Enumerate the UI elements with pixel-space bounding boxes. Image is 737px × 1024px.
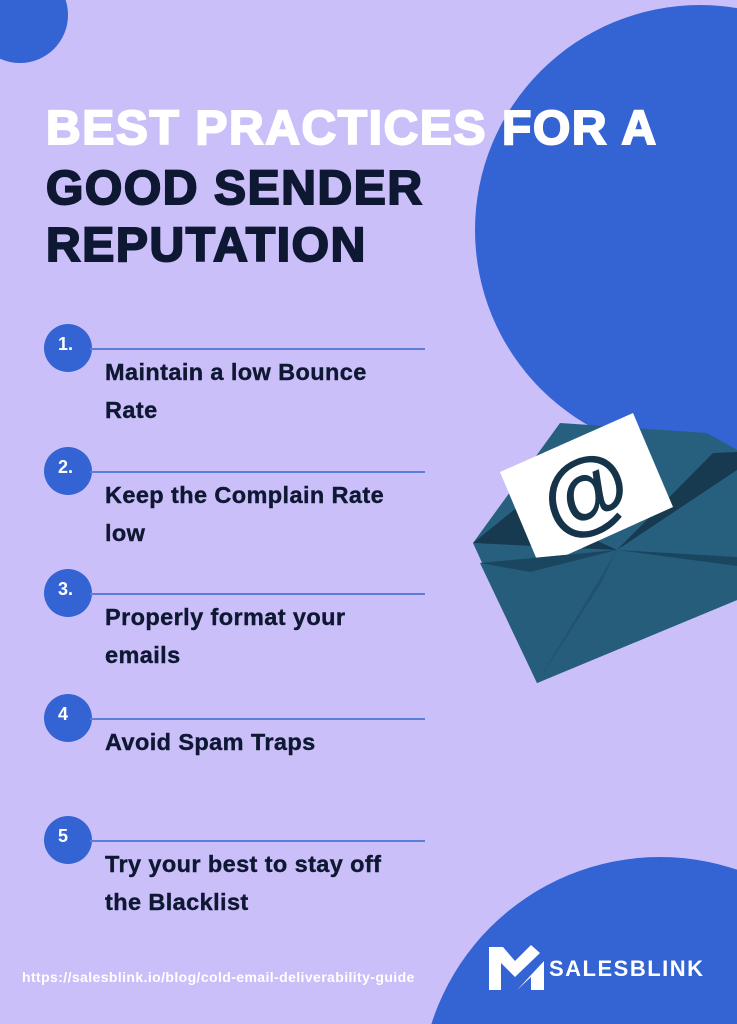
logo: SALESBLINK (549, 956, 705, 981)
item 3: 3. (58, 579, 73, 599)
item 5: Try your best to stay off (105, 851, 381, 877)
title (46, 110, 656, 262)
logo (489, 945, 703, 990)
decorative circle right (475, 5, 737, 450)
item 2: low (105, 520, 145, 546)
icon: envelope with @: @ (525, 429, 644, 555)
icon: envelope with @ (473, 413, 737, 683)
item 2 (44, 447, 425, 542)
item 2: 2. (58, 457, 73, 477)
item 5 (44, 816, 425, 910)
item 4 (44, 694, 425, 756)
item 2: Keep the Complain Rate (105, 482, 384, 508)
item 5: the Blacklist (105, 889, 249, 915)
item 4: Avoid Spam Traps (105, 729, 316, 755)
item 1: Rate (105, 397, 158, 423)
title: REPUTATION (46, 219, 367, 272)
item 3: emails (105, 642, 181, 668)
title: BEST PRACTICES FOR A (46, 102, 658, 155)
item 3: Properly format your (105, 604, 345, 630)
item 1: 1. (58, 334, 73, 354)
item 1 (44, 324, 425, 418)
item 3 (44, 569, 425, 664)
item 5: 5 (58, 826, 68, 846)
url footer: https://salesblink.io/blog/cold-email-deliverability-guide (22, 969, 415, 985)
title: GOOD SENDER (46, 162, 424, 215)
decorative circle bottom-right (431, 857, 737, 1024)
item 4: 4 (58, 704, 68, 724)
item 1: Maintain a low Bounce (105, 359, 367, 385)
decorative circle top-left (0, 0, 68, 63)
